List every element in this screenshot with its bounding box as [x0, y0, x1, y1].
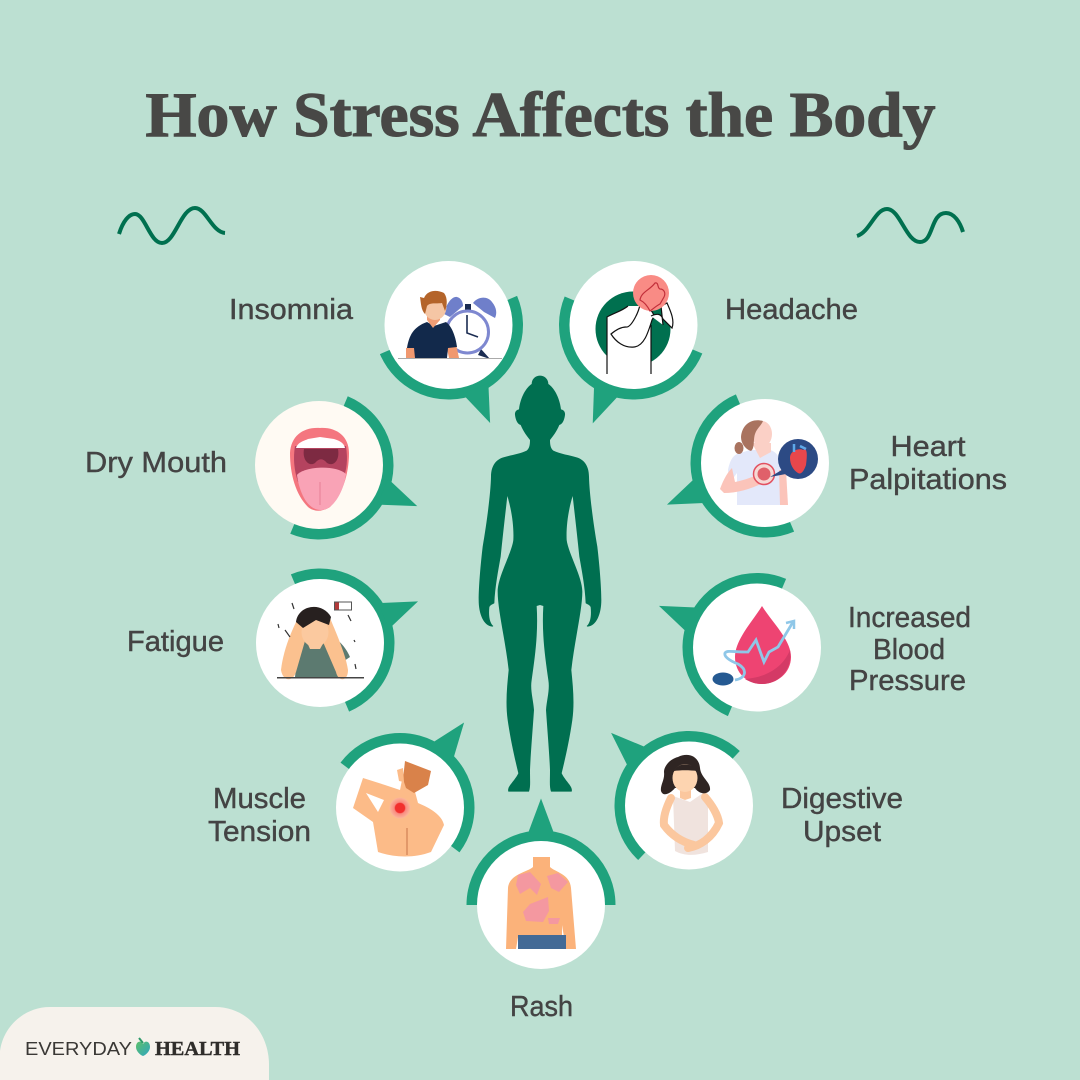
callout ring: [472, 798, 610, 905]
label: Muscle: [213, 783, 306, 815]
label line 2: Upset: [803, 816, 881, 848]
icon: head in hands: [596, 275, 673, 374]
label line 2: Tension: [208, 816, 311, 848]
panel: fatigue: [127, 538, 445, 707]
white disc: [256, 579, 384, 707]
cream disc: [255, 401, 383, 529]
central body silhouette: [479, 376, 601, 792]
callout ring: [529, 299, 697, 450]
logo wordmark: health: HEALTH: [155, 1038, 240, 1060]
label: Rash: [510, 991, 573, 1023]
white disc: [701, 399, 829, 527]
panel: rash: [472, 798, 610, 1023]
icon: apple heart: [136, 1038, 150, 1056]
callout ring: [385, 298, 554, 450]
label: Insomnia: [229, 294, 353, 326]
callout ring: [632, 542, 784, 711]
panel: increased blood pressure: [632, 542, 971, 712]
label: Increased: [848, 602, 971, 634]
label: Digestive: [781, 783, 903, 815]
icon: open mouth with dry tongue: [290, 428, 349, 511]
icon: woman with heart callout: [720, 420, 818, 505]
label line 2: Palpitations: [849, 464, 1007, 496]
label: Heart: [890, 431, 966, 463]
icon: blood drop with cuff line: [712, 606, 794, 686]
label: Headache: [725, 294, 858, 326]
callout ring: [564, 682, 736, 856]
title: How Stress Affects the Body: [146, 80, 936, 150]
callout ring: [293, 538, 445, 707]
icon: tired man and low battery: [277, 602, 364, 679]
icon: woman holding stomach: [661, 755, 719, 855]
panel: headache: [529, 261, 858, 450]
white disc: [625, 742, 753, 870]
white disc: [570, 261, 698, 389]
white disc: [477, 841, 605, 969]
white disc: [336, 744, 464, 872]
callout ring: [640, 399, 792, 568]
logo badge: [0, 1007, 269, 1080]
badge background: [0, 1007, 269, 1080]
white disc: [384, 261, 512, 389]
callout ring: [292, 401, 444, 570]
callout ring: [345, 681, 519, 849]
icon: back with rash: [506, 857, 576, 949]
panel: digestive upset: [564, 682, 903, 870]
right wave ornament: [857, 209, 963, 242]
icon: back with neck pain: [353, 761, 444, 856]
logo wordmark: everyday: EVERYDAY: [25, 1038, 132, 1059]
panel: muscle tension: [208, 681, 519, 872]
label: Dry Mouth: [85, 447, 227, 479]
label line 3: Pressure: [849, 665, 966, 697]
panel: insomnia: [229, 261, 554, 450]
icon: man with alarm clock: [398, 291, 502, 359]
white disc: [693, 584, 821, 712]
label: Fatigue: [127, 626, 224, 658]
panel: dry mouth: [85, 401, 444, 570]
panel: heart palpitations: [640, 399, 1007, 568]
left wave ornament: [119, 208, 225, 243]
label line 2: Blood: [873, 634, 945, 666]
